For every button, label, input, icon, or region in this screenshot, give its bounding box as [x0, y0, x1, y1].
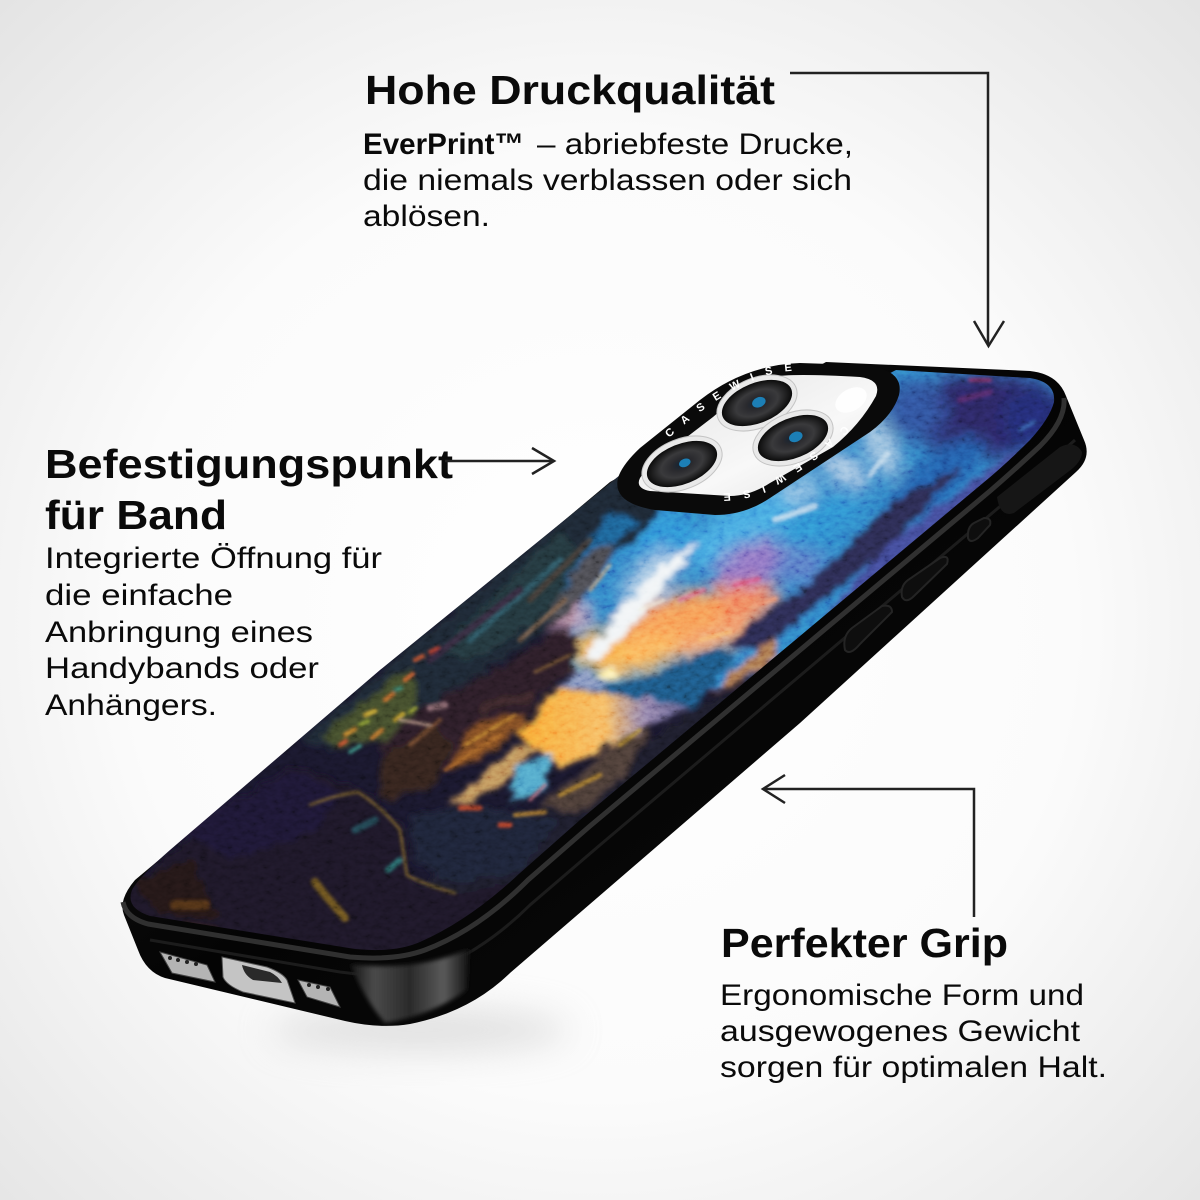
- case body: [122, 362, 1087, 1026]
- heading: Befestigungspunkt: [45, 441, 453, 487]
- canvas texture: [154, 370, 1054, 948]
- camera glass: [639, 375, 877, 496]
- painted scene: [134, 370, 1054, 923]
- camera island: [617, 363, 900, 515]
- body text: Handybands oder: [45, 652, 319, 685]
- body text: [720, 979, 1107, 1084]
- dog: [447, 745, 545, 805]
- body text: ablösen.: [363, 200, 490, 233]
- body text: – abriebfeste Drucke,: [537, 128, 853, 161]
- corner gloss: [350, 948, 470, 1023]
- ring lettering bottom: [672, 425, 845, 494]
- shore vegetation: [540, 722, 655, 812]
- body text: [45, 542, 382, 722]
- heading: für Band: [45, 492, 227, 538]
- heading: Hohe Druckqualität: [365, 67, 775, 113]
- case rim highlight: [123, 398, 1064, 958]
- foliage strokes: [340, 648, 438, 752]
- side seam: [150, 440, 1075, 975]
- camera island: CASEWISE: [724, 427, 848, 501]
- phone shadow: [270, 1008, 570, 1052]
- foreground rock: [134, 768, 434, 938]
- sasquatch figure: [380, 633, 582, 775]
- heading: Perfekter Grip: [721, 920, 1008, 966]
- sun: [601, 668, 619, 680]
- body text: Anbringung eines: [45, 616, 313, 649]
- strap anchor: [997, 444, 1082, 514]
- foliage: [318, 665, 420, 748]
- sky base: [566, 370, 1054, 700]
- fur highlights: [445, 735, 500, 770]
- lake: [515, 688, 695, 768]
- lens 1: [709, 364, 805, 442]
- texture strokes: [175, 380, 1034, 930]
- camera ring: [617, 363, 900, 515]
- body text: Integrierte Öffnung für: [45, 542, 382, 575]
- callout: strap anchor: [45, 441, 453, 722]
- phone case illustration: [120, 362, 1087, 1026]
- body text: sorgen für optimalen Halt.: [720, 1051, 1107, 1084]
- lens 3: [634, 425, 730, 503]
- arrow: grip: [763, 775, 974, 917]
- right tree line: [725, 465, 965, 650]
- callout: grip: [720, 920, 1107, 1084]
- arrow: print quality: [790, 73, 1004, 346]
- body text: ausgewogenes Gewicht: [720, 1015, 1081, 1048]
- heading: [45, 441, 453, 538]
- sky strokes: [700, 632, 730, 640]
- flash: [831, 382, 871, 418]
- cloud streak: [582, 543, 697, 660]
- lower right trees: [432, 658, 772, 892]
- ring lettering top: [669, 370, 835, 438]
- callout: print quality: [363, 67, 853, 233]
- camera island: CASEWISE: [666, 364, 792, 436]
- blue forest on the far shore: [595, 648, 738, 706]
- body text: Anhängers.: [45, 689, 217, 722]
- right speaker: [298, 980, 340, 1007]
- bottom ports: [160, 952, 340, 1007]
- right edge sky: [825, 440, 1029, 614]
- lens 2: [745, 399, 841, 477]
- tree highlights: [470, 560, 560, 640]
- body text: Ergonomische Form und: [720, 979, 1084, 1012]
- body text: EverPrint™: [363, 128, 524, 161]
- artwork: forest lake at sunset: [130, 370, 1054, 950]
- left trees: [300, 470, 660, 750]
- body text: die niemals verblassen oder sich: [363, 164, 852, 197]
- orange lit trees: [712, 635, 780, 695]
- sasquatch lower fur: [380, 725, 455, 800]
- body text: [363, 128, 853, 233]
- charging port: [222, 957, 295, 1003]
- rock highlights: [310, 792, 455, 893]
- side buttons: [844, 518, 990, 652]
- left speaker: [160, 952, 215, 982]
- arrow: strap anchor: [445, 448, 554, 474]
- body text: die einfache: [45, 579, 233, 612]
- distant mountain: [558, 668, 610, 690]
